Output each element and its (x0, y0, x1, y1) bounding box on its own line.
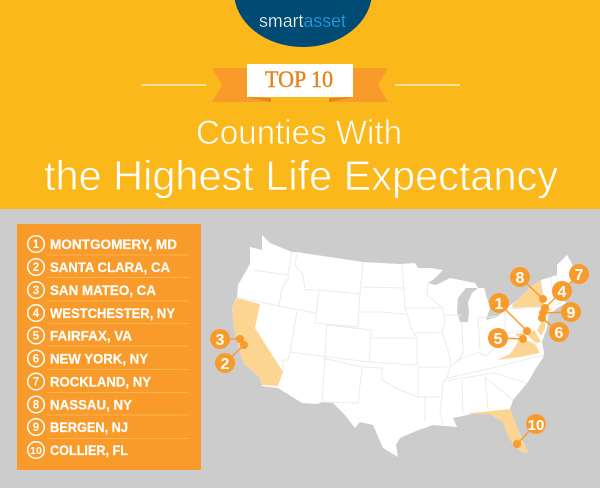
title: Counties With (196, 114, 402, 152)
top 10 ribbon: TOP 10 (265, 67, 333, 92)
numbered map pins: 10 (528, 417, 544, 434)
numbered map pins: 9 (567, 305, 576, 322)
panel: ranked county list: 3 (33, 285, 39, 297)
top 10 ribbon (141, 64, 460, 102)
panel: ranked county list: SAN MATEO, CA (50, 283, 156, 298)
map location dots (236, 295, 549, 448)
panel: ranked county list: 1 (33, 239, 40, 251)
panel: ranked county list: 10 (30, 445, 42, 457)
panel: ranked county list: 5 (33, 330, 40, 342)
numbered map pins: 1 (495, 296, 504, 313)
panel: ranked county list: NEW YORK, NY (50, 352, 148, 366)
panel: ranked county list: BERGEN, NJ (50, 420, 128, 435)
panel: ranked county list: SANTA CLARA, CA (50, 260, 170, 275)
title (44, 114, 558, 199)
numbered map pins (210, 264, 589, 434)
title: the Highest Life Expectancy (44, 152, 558, 199)
panel: ranked county list: NASSAU, NY (50, 398, 132, 412)
numbered map pins: 4 (558, 284, 567, 301)
panel: ranked county list: FAIRFAX, VA (50, 328, 132, 344)
panel: ranked county list: 2 (33, 262, 39, 274)
connector lines (220, 274, 579, 444)
panel: ranked county list: 6 (33, 354, 39, 366)
map background (0, 209, 600, 488)
numbered map pins: 2 (221, 356, 230, 373)
panel: ranked county list: MONTGOMERY, MD (50, 237, 177, 252)
US map (232, 235, 577, 457)
panel: ranked county list: WESTCHESTER, NY (50, 306, 175, 321)
panel: ranked county list: COLLIER, FL (50, 443, 128, 458)
numbered map pins: 6 (555, 325, 564, 342)
lake michigan (457, 288, 478, 322)
panel: ranked county list: 7 (33, 376, 39, 388)
highlighted states (232, 280, 553, 453)
panel: ranked county list: 8 (33, 400, 40, 412)
panel: ranked county list: 9 (33, 422, 39, 434)
header background (0, 0, 600, 209)
numbered map pins: 8 (516, 270, 525, 287)
panel: ranked county list: 4 (33, 308, 40, 320)
numbered map pins: 7 (575, 267, 584, 284)
logo: smartasset: smartasset (259, 10, 346, 31)
logo: smartasset (234, 0, 372, 47)
numbered map pins: 3 (216, 332, 225, 349)
numbered map pins: 5 (494, 331, 503, 348)
panel: ranked county list: ROCKLAND, NY (50, 374, 151, 390)
state borders (237, 252, 562, 425)
panel: ranked county list (17, 224, 201, 470)
